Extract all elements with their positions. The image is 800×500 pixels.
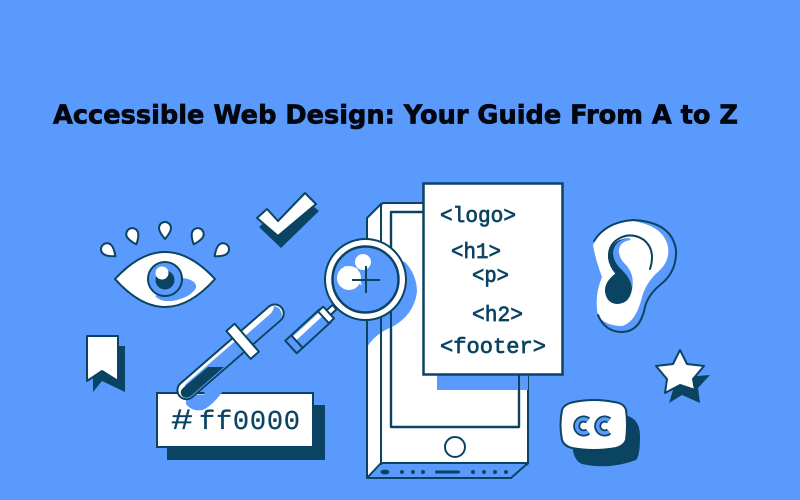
icon: ear: [593, 220, 676, 332]
icon: magnifying glass: [285, 239, 406, 353]
color code label: ff0000: [199, 408, 300, 438]
document panel: [424, 184, 562, 390]
magnifier shadow: [367, 255, 417, 347]
phone speaker dots: [380, 470, 508, 474]
document panel: <footer>: [440, 335, 546, 360]
icon: closed captions: [560, 400, 640, 466]
color code label: #: [171, 405, 193, 439]
icon: star: [656, 350, 710, 403]
color code label: [157, 391, 325, 460]
document panel: <h1>: [451, 240, 501, 265]
icon: bookmark: [87, 336, 125, 392]
phone screen: [391, 212, 519, 427]
icon: pipette: [167, 294, 294, 410]
phone edge lines: [367, 204, 391, 478]
document panel: <p>: [472, 264, 509, 289]
document panel: <h2>: [472, 303, 523, 328]
phone home button: [445, 437, 465, 457]
icon: check mark: [257, 193, 319, 248]
icon: eye: [99, 222, 231, 307]
title: Accessible Web Design: Your Guide From A to Z: [53, 100, 738, 130]
phone: [367, 203, 528, 478]
document panel: <logo>: [440, 204, 516, 229]
